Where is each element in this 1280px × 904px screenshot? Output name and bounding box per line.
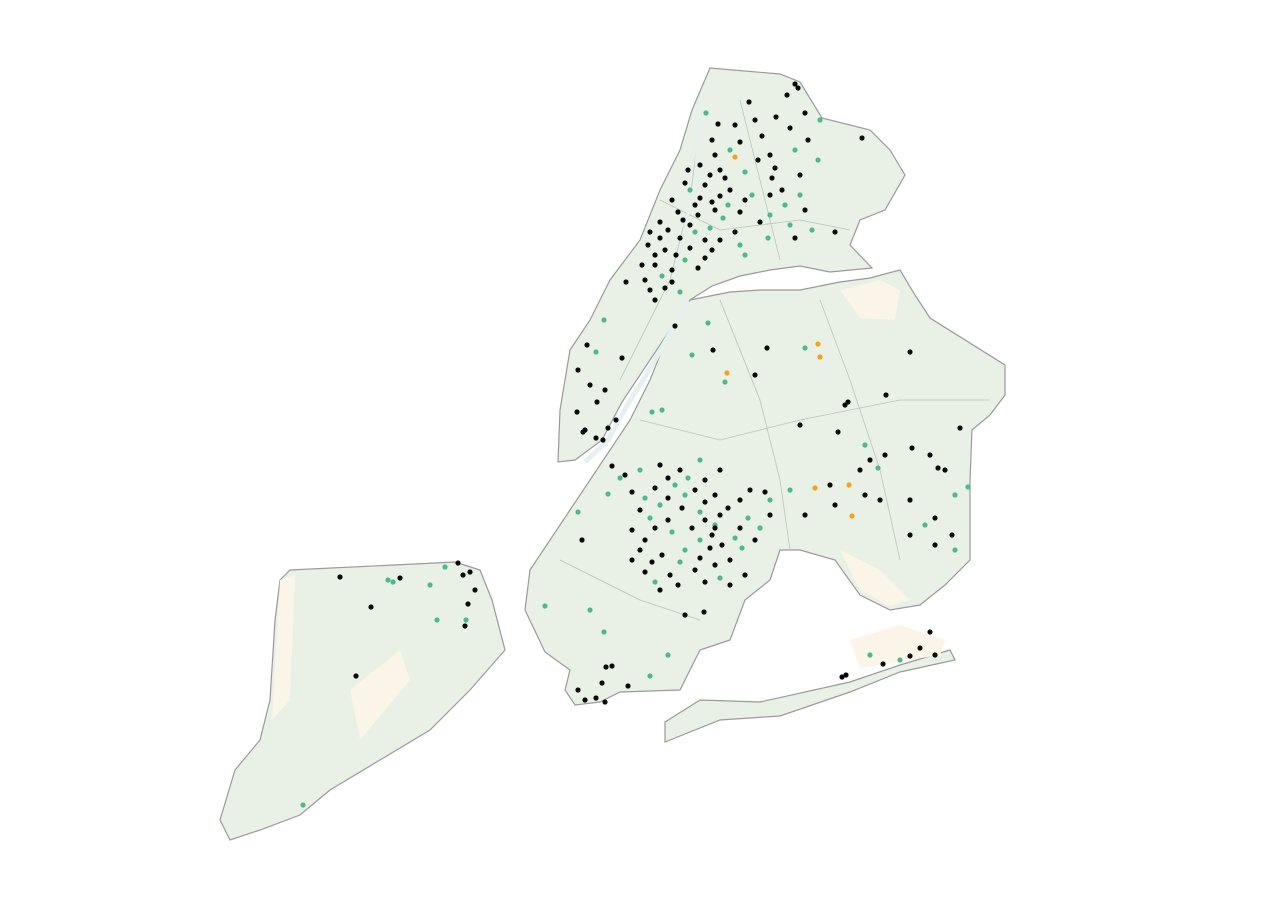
dots: lower Manhattan [574, 317, 678, 443]
borough: Bronx and Manhattan [558, 68, 905, 462]
dots: Brooklyn cluster [542, 407, 773, 705]
borough: Staten Island [220, 562, 505, 840]
dots: Bronx and upper Manhattan cluster [623, 81, 865, 303]
river gap: Harlem River [672, 110, 700, 300]
borough: Queens and Brooklyn [525, 270, 1005, 705]
borough: Rockaway peninsula [665, 625, 955, 742]
dots: Staten Island [300, 560, 478, 808]
dots: Queens [689, 320, 971, 553]
river gap: East River [585, 302, 690, 462]
dots: Rockaway [839, 629, 938, 680]
